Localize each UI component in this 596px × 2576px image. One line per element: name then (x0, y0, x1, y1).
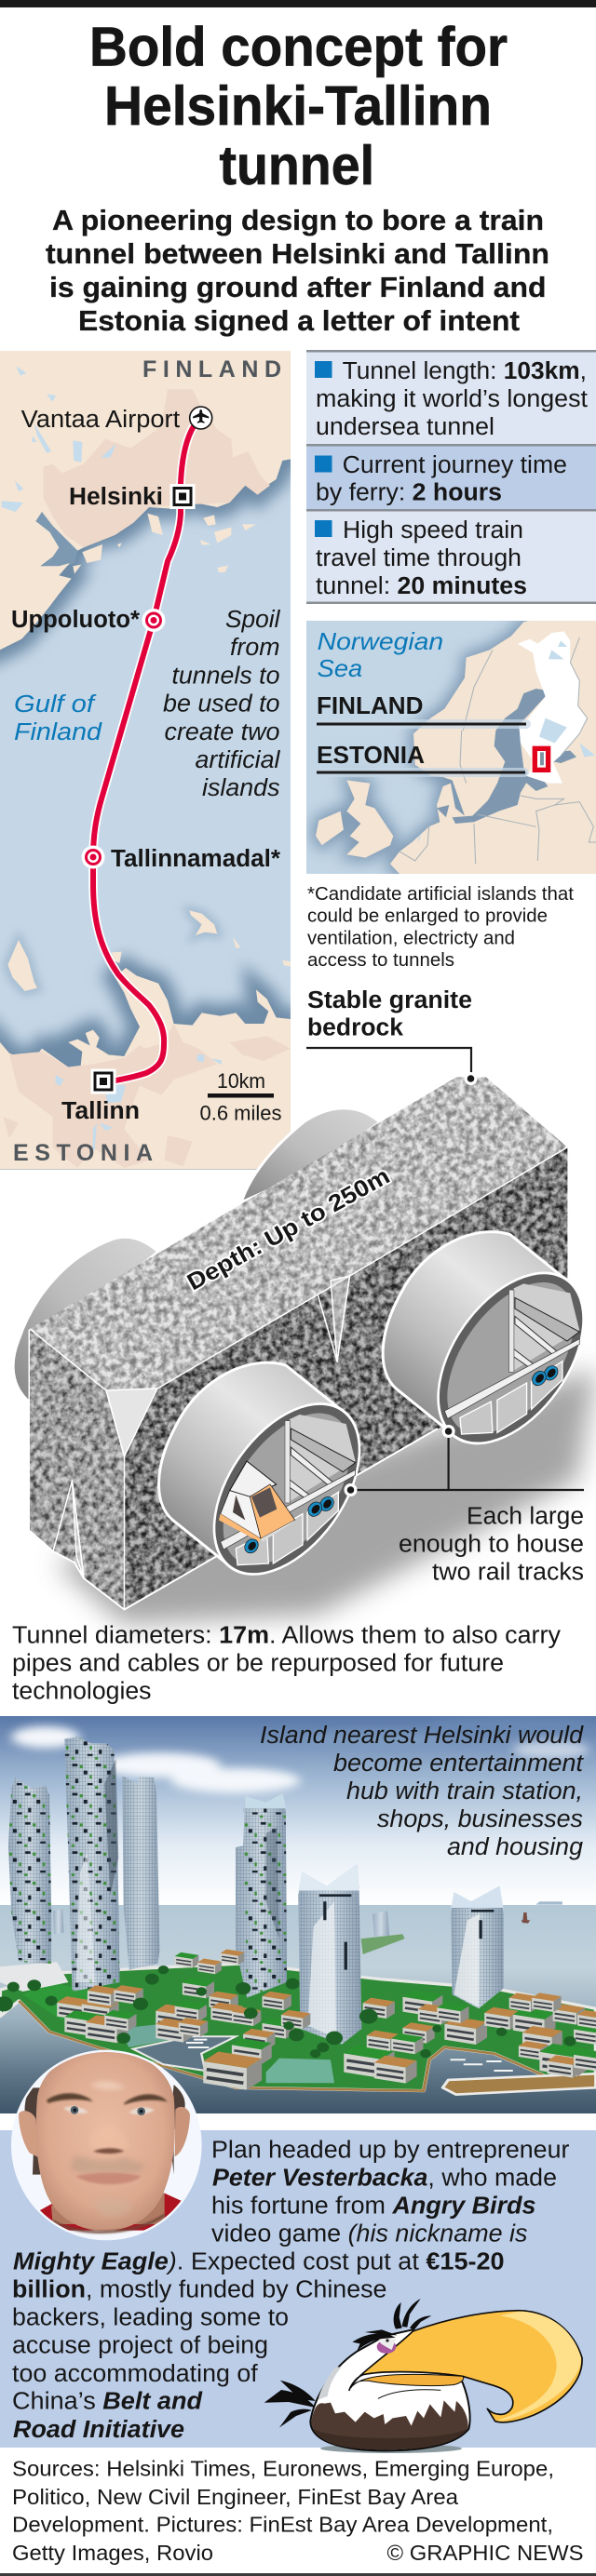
red locator box (535, 748, 549, 770)
panel: train time fact: High speed train (343, 517, 523, 543)
text: project backers: Peter Vesterbacka , who made (212, 2165, 557, 2191)
sources: Sources: Helsinki Times, Euronews, Emerging Europe, (12, 2457, 554, 2481)
spoil note: tunnels to (171, 663, 279, 689)
text: project backers: accuse project of being (12, 2333, 268, 2359)
panel: tunnel length fact: undersea tunnel (316, 414, 494, 440)
locator labels: ESTONIA (317, 743, 425, 769)
leader: bedrock (306, 1048, 477, 1085)
marker: Tallinn (91, 1068, 115, 1094)
houses (57, 1996, 94, 2020)
front tunnel left (159, 1362, 391, 1603)
footnote: could be enlarged to provide (307, 906, 548, 927)
subtitle: is gaining ground after Finland and (49, 271, 546, 303)
icon: Mighty Eagle bird (264, 2299, 582, 2453)
text: tunnel diameters: technologies (12, 1679, 151, 1705)
scale bar: 10km (217, 1069, 265, 1093)
boats (186, 2040, 513, 2071)
footnote: access to tunnels (307, 950, 454, 971)
sources: Development. Pictures: FinEst Bay Area Development, (12, 2513, 553, 2537)
label: stable granite bedrock: Stable granite (307, 987, 472, 1013)
panel: train time fact: travel time through (316, 545, 522, 571)
top rule (0, 0, 596, 7)
map labels: Helsinki (69, 484, 163, 510)
sources: © GRAPHIC NEWS (387, 2541, 583, 2565)
front tunnel right (383, 1232, 596, 1471)
subtitle: tunnel between Helsinki and Tallinn (46, 237, 549, 270)
text: project backers: China’s Belt and (12, 2389, 204, 2415)
map labels (11, 356, 281, 1166)
spoil note: islands (202, 775, 280, 801)
scale bar: 0.6 miles (199, 1102, 281, 1124)
subtitle (46, 204, 549, 337)
portrait: Peter Vesterbacka (11, 2050, 202, 2240)
label: each large: Each large (467, 1504, 584, 1530)
text: tunnel diameters: Tunnel diameters: 17m. Allows them to also carry (12, 1622, 561, 1648)
title: tunnel (220, 135, 374, 196)
map labels: Tallinn (61, 1098, 140, 1124)
map labels: FINLAND (142, 356, 281, 382)
footnote (307, 884, 574, 971)
text: project backers: Road Initiative (13, 2417, 184, 2443)
text: project backers: billion, mostly funded by Chinese (12, 2276, 387, 2302)
footnote: ventilation, electricty and (307, 929, 515, 949)
subtitle: A pioneering design to bore a train (52, 204, 544, 236)
text: tunnel diameters: pipes and cables or be repurposed for future (12, 1651, 504, 1677)
locator labels: FINLAND (317, 693, 423, 719)
text: project backers: backers, leading some to (12, 2305, 289, 2331)
route line (93, 426, 194, 1080)
spoil note (163, 607, 281, 801)
rock fractures (30, 1147, 567, 1610)
text: project backers: too accommodating of (12, 2361, 259, 2387)
spoil note: create two (164, 719, 279, 745)
leader: tunnels (345, 1425, 584, 1496)
text: project backers: video game (his nickname is (211, 2220, 528, 2247)
text: project backers: his fortune from Angry Birds (211, 2194, 536, 2220)
label: each large (399, 1504, 584, 1586)
sources (12, 2457, 583, 2565)
map labels: Tallinnamadal* (111, 846, 280, 872)
subtitle: Estonia signed a letter of intent (78, 304, 520, 337)
panel: tunnel length fact: making it world’s longest (316, 386, 588, 412)
panel: ferry time fact: Current journey time (343, 452, 567, 478)
footnote: *Candidate artificial islands that (307, 884, 574, 905)
locator labels: Sea (318, 654, 362, 682)
photo caption: become entertainment (333, 1751, 584, 1777)
sources: Politico, New Civil Engineer, FinEst Bay Area (12, 2485, 458, 2509)
icon: airport (190, 407, 212, 429)
marker: Helsinki (169, 484, 196, 509)
panel: train time fact (306, 509, 596, 604)
label: each large: two rail tracks (432, 1560, 584, 1586)
bottom rule (0, 2573, 596, 2576)
map labels: ESTONIA (13, 1140, 153, 1166)
spoil note: artificial (196, 747, 281, 773)
granite left face (30, 1329, 125, 1610)
text: project backers: Mighty Eagle ). Expected cost put at €15-20 (13, 2249, 505, 2275)
label: stable granite bedrock (307, 987, 472, 1041)
panel: route map (0, 349, 291, 1170)
photo caption: and housing (447, 1834, 583, 1860)
locator labels (313, 627, 531, 777)
towers (8, 1737, 504, 2045)
label: depth: Depth: Up to 250m (183, 1162, 394, 1295)
cutaway: granite block with tunnels (13, 1078, 596, 1624)
locator labels: Norwegian (318, 627, 443, 655)
granite top face (30, 1078, 567, 1390)
panel: tunnel length fact (306, 350, 596, 445)
photo caption: Island nearest Helsinki would (260, 1723, 584, 1749)
clouds (11, 1718, 596, 1793)
map labels: Finland (14, 719, 102, 745)
distant island (361, 1934, 405, 1954)
photo caption: shops, businesses (377, 1806, 583, 1832)
map labels: Uppoluoto* (11, 607, 140, 633)
spoil note: from (230, 635, 279, 661)
spoil note: Spoil (225, 607, 281, 633)
title: Helsinki-Tallinn (104, 75, 492, 137)
panel: locator map (306, 619, 596, 874)
scale bar (200, 1073, 281, 1120)
text: tunnel diameters (12, 1622, 561, 1705)
text: project backers: Plan headed up by entrepreneur (211, 2137, 570, 2163)
marker: Tallinnamadal (82, 845, 104, 869)
title (89, 17, 508, 196)
spoil note: be used to (163, 691, 279, 717)
title: Bold concept for (89, 17, 508, 78)
panel: train time fact: tunnel: 20 minutes (316, 573, 527, 599)
text: project backers (12, 2137, 570, 2443)
marker: Uppoluoto (142, 609, 166, 632)
map labels: Vantaa Airport (21, 407, 180, 433)
panel: ferry time fact: by ferry: 2 hours (316, 480, 502, 506)
train (219, 1461, 295, 1556)
photo caption: hub with train station, (346, 1778, 583, 1805)
sources: Getty Images, Rovio (12, 2541, 213, 2565)
panel: ferry time fact (306, 444, 596, 510)
panel: background for biography (0, 2130, 596, 2448)
map labels: Gulf of (14, 691, 97, 718)
back tunnel left (13, 1237, 158, 1402)
back tunnel right (241, 1108, 380, 1202)
island base (0, 1964, 596, 2091)
panel: tunnel length fact: Tunnel length: 103km, (343, 358, 587, 384)
label: stable granite bedrock: bedrock (307, 1015, 404, 1041)
granite right face (125, 1147, 567, 1610)
photo: island development (0, 1716, 596, 2113)
photo caption (260, 1723, 584, 1860)
label: each large: enough to house (399, 1532, 584, 1558)
trees (0, 1966, 576, 2058)
